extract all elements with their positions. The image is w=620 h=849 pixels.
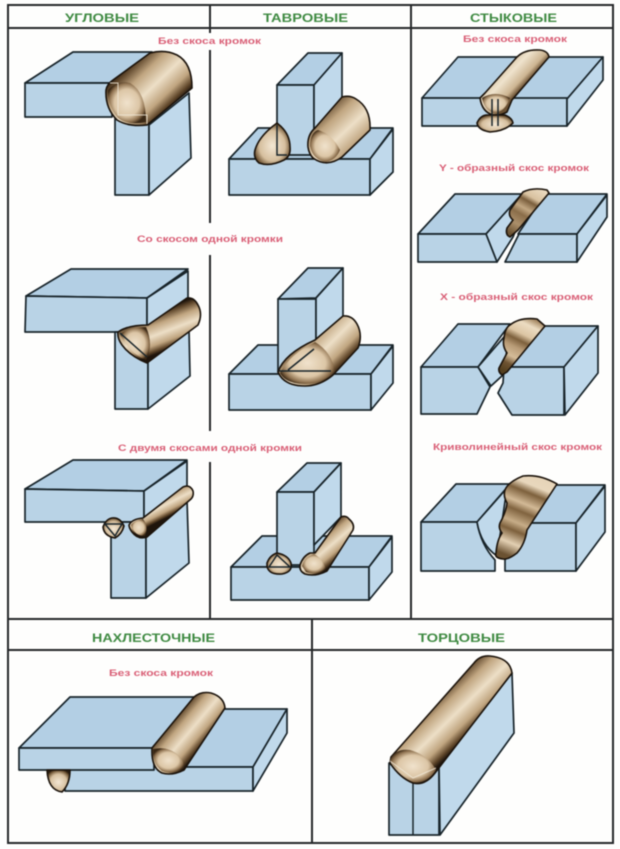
weld bead	[390, 656, 512, 784]
diagram: edge joint	[389, 656, 514, 835]
label: butt no bevel: Без скоса кромок	[463, 34, 567, 45]
diagram: tee joint with single bevel	[229, 268, 393, 410]
label: no bevel, row 1: Без скоса кромок	[158, 36, 261, 47]
diagram: corner joint without bevel	[25, 51, 192, 195]
heading: lap joints: НАХЛЕСТОЧНЫЕ	[92, 631, 215, 645]
stepped weld bead	[496, 476, 557, 559]
diagram: tee joint without bevel	[229, 53, 393, 195]
weld bead	[106, 51, 192, 125]
weld bead	[278, 316, 360, 386]
diagram: butt joint with curved bevel	[421, 476, 605, 571]
right fillet bead	[308, 96, 370, 163]
diagram: lap joint	[19, 692, 287, 792]
right bead	[300, 516, 354, 575]
left fillet bead	[254, 123, 290, 164]
right bead	[129, 486, 193, 538]
left bead	[103, 518, 124, 538]
label: butt X bevel: X - образный скос кромок	[440, 292, 593, 303]
label: butt curved bevel: Криволинейный скос кромок	[433, 442, 602, 453]
label: single-bevel, row 2: Со скосом одной кромки	[137, 234, 283, 245]
stepped weld bead	[499, 319, 545, 375]
heading: butt joints: СТЫКОВЫЕ	[470, 11, 557, 25]
stepped weld bead	[506, 189, 549, 237]
diagram: butt joint with V bevel	[418, 189, 607, 262]
top weld bead	[152, 692, 225, 774]
label: lap no bevel: Без скоса кромок	[109, 668, 213, 679]
heading: edge joints: ТОРЦОВЫЕ	[418, 631, 505, 645]
diagram: tee joint with double bevel	[231, 463, 392, 600]
upper weld bead	[480, 50, 549, 115]
diagram: butt joint with X bevel	[421, 319, 598, 415]
left bead	[267, 553, 291, 574]
heading: tee joints: ТАВРОВЫЕ	[263, 11, 348, 25]
diagram: corner joint with double bevel	[25, 460, 193, 598]
label: butt V bevel: Y - образный скос кромок	[439, 163, 589, 174]
heading: corner joints: УГЛОВЫЕ	[65, 11, 139, 25]
root bead	[477, 115, 513, 132]
diagram: corner joint with single bevel	[25, 269, 200, 409]
diagram: butt joint without bevel	[422, 50, 603, 132]
label: double-bevel, row 3: С двумя скосами одной кромки	[118, 443, 302, 454]
gap lines	[492, 99, 498, 126]
underside bead	[47, 770, 70, 792]
weld bead	[118, 298, 200, 363]
